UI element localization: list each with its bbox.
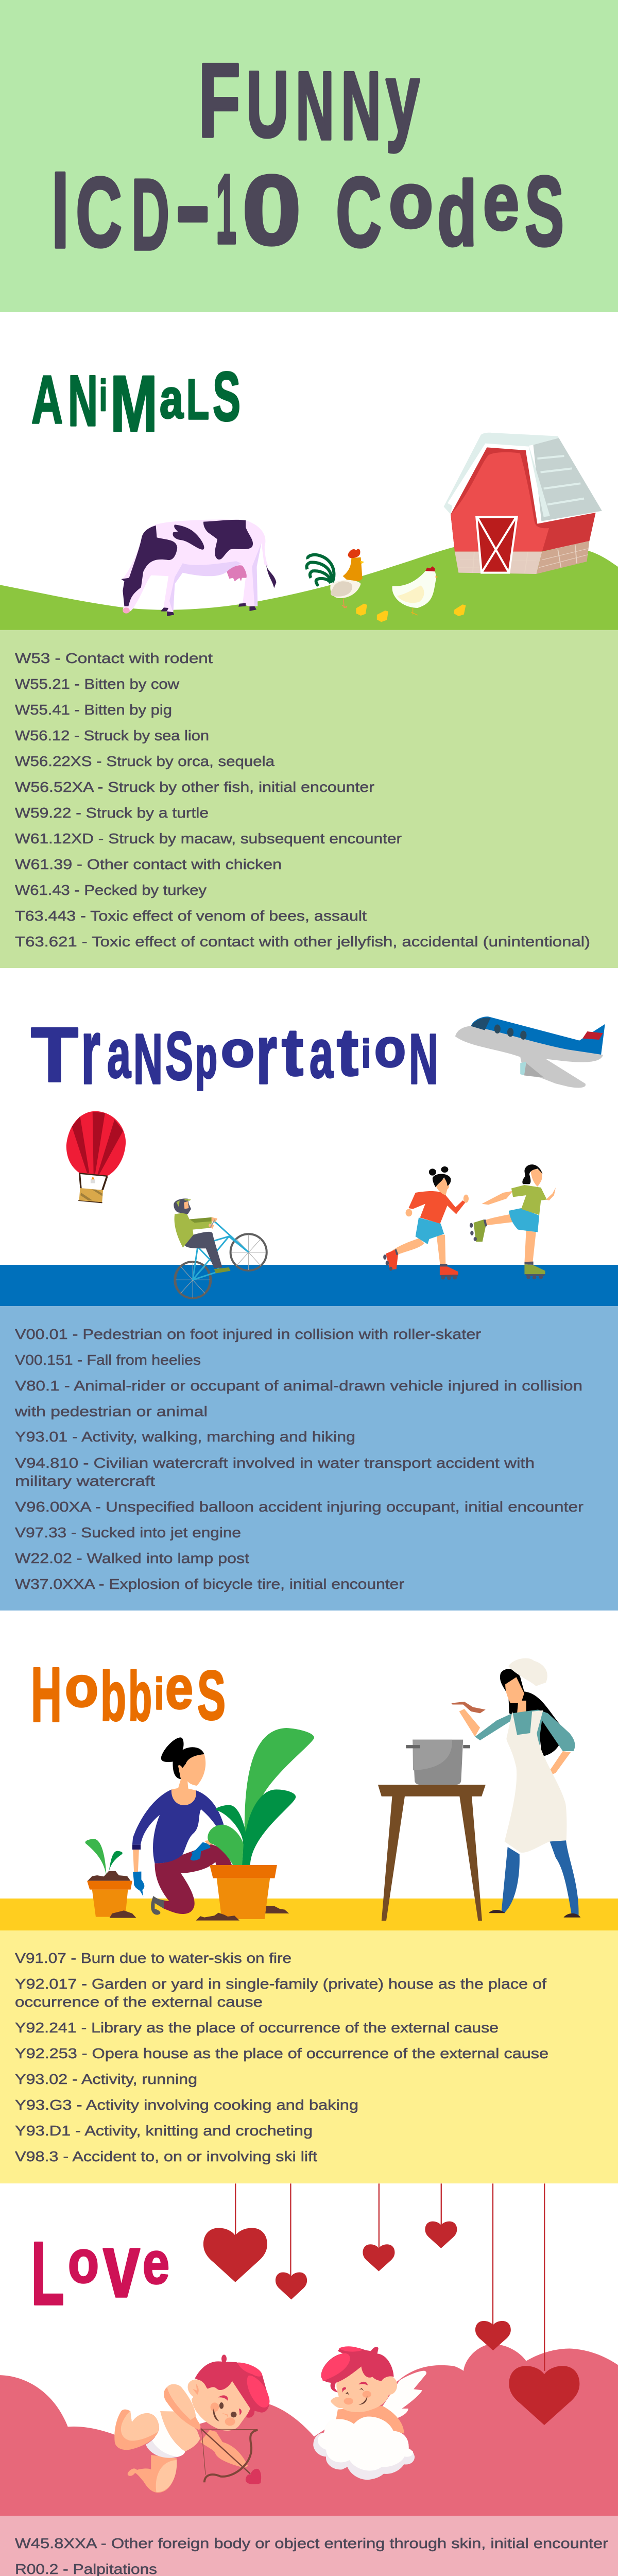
heading: transportation: t xyxy=(337,1014,358,1090)
panel: hobbies codes: V91.07 - Burn due to water-skis on fire xyxy=(15,1950,291,1966)
heading: hobbies: e xyxy=(165,1654,193,1721)
icon: big potted plant leaves back xyxy=(245,1728,314,1834)
panel: transportation codes xyxy=(0,1306,618,1611)
title: U xyxy=(246,52,289,157)
title: I xyxy=(52,149,69,270)
panel: transportation codes: V00.01 - Pedestrian on foot injured in collision with roller-skater xyxy=(15,1326,481,1342)
heading: transportation: r xyxy=(256,1007,277,1101)
icon: cupid with bow xyxy=(114,2354,269,2493)
panel: animal codes xyxy=(0,630,618,968)
icon: hanging hearts xyxy=(203,2183,579,2425)
heading: hobbies: b xyxy=(128,1657,152,1735)
title: y xyxy=(386,42,420,153)
panel: animal codes: W55.21 - Bitten by cow xyxy=(15,676,180,692)
panel: animal codes: W53 - Contact with rodent xyxy=(15,650,213,666)
icon: big potted plant xyxy=(196,1789,296,1921)
panel: hobbies codes: occurrence of the external cause xyxy=(15,1994,263,2010)
heading: animals: A xyxy=(31,362,63,437)
title: d xyxy=(437,162,477,265)
heading: transportation: a xyxy=(310,1015,334,1092)
panel: transportation codes: Y93.01 - Activity, walking, marching and hiking xyxy=(15,1429,355,1445)
title: N xyxy=(341,52,381,160)
title: 1 xyxy=(216,154,236,264)
panel: hobbies codes: Y92.253 - Opera house as the place of occurrence of the external cause xyxy=(15,2045,548,2061)
panel: hobbies codes: Y93.02 - Activity, running xyxy=(15,2071,197,2087)
heading: love: o xyxy=(68,2228,99,2295)
icon: airplane xyxy=(455,1016,605,1088)
panel: animal codes: W56.12 - Struck by sea lion xyxy=(15,727,209,743)
panel: animal codes: W61.43 - Pecked by turkey xyxy=(15,882,207,898)
panel: header xyxy=(0,0,618,312)
panel: animal codes: W61.39 - Other contact with chicken xyxy=(15,856,282,872)
panel: transportation codes: W37.0XXA - Explosion of bicycle tire, initial encounter xyxy=(15,1576,404,1592)
heading: transportation: p xyxy=(195,1024,217,1091)
panel: animal codes: T63.443 - Toxic effect of venom of bees, assault xyxy=(15,908,367,924)
heading: transportation: r xyxy=(81,1000,100,1104)
icon: chef at table with pot xyxy=(378,1658,580,1921)
heading: love: L xyxy=(31,2224,64,2324)
panel: animals xyxy=(0,358,618,630)
heading: transportation: o xyxy=(374,1019,406,1078)
illustrations: balloon, cyclist, skaters xyxy=(66,1111,556,1298)
illustration: farm animals and barn xyxy=(121,433,602,622)
heading: transportation: S xyxy=(165,1018,193,1094)
heading: animals: i xyxy=(99,371,107,420)
icon: gardener with plants xyxy=(85,1728,314,1921)
panel: hobbies codes xyxy=(0,1930,618,2183)
panel: animal codes: W59.22 - Struck by a turtle xyxy=(15,805,209,821)
floor xyxy=(0,1899,618,1930)
title: o xyxy=(389,157,433,244)
heading: animals: a xyxy=(160,367,184,430)
panel: transportation xyxy=(0,1000,618,1306)
panel: hobbies codes: Y93.D1 - Activity, knitting and crocheting xyxy=(15,2123,313,2139)
panel: animal codes: W56.22XS - Struck by orca, sequela xyxy=(15,753,274,769)
panel: transportation codes: V00.151 - Fall from heelies xyxy=(15,1352,201,1368)
heading: hobbies: H xyxy=(31,1651,62,1738)
icon: barn xyxy=(444,433,602,574)
panel: transportation codes: V96.00XA - Unspecified balloon accident injuring occupant, initial encounter xyxy=(15,1499,583,1515)
heading: transportation: t xyxy=(282,1014,303,1090)
icon: small potted plant xyxy=(85,1839,136,1918)
heading: animals: M xyxy=(110,359,158,448)
heading: animals: N xyxy=(68,360,98,441)
panel: hobbies xyxy=(0,1651,618,1930)
icon: chicks xyxy=(356,604,466,622)
heading: transportation: N xyxy=(133,1020,163,1099)
icon: gardener xyxy=(132,1737,232,1915)
road xyxy=(0,1265,618,1306)
heading: transportation: i xyxy=(362,1032,371,1076)
icon: cyclist on bicycle xyxy=(174,1198,267,1298)
ground: green hill xyxy=(0,546,618,630)
panel: transportation codes: V97.33 - Sucked into jet engine xyxy=(15,1524,241,1540)
panel: hobbies codes: Y93.G3 - Activity involving cooking and baking xyxy=(15,2097,358,2113)
panel: transportation codes: with pedestrian or animal xyxy=(14,1403,208,1419)
pink cloud hills xyxy=(0,2344,618,2519)
panel: animal codes: W56.52XA - Struck by other fish, initial encounter xyxy=(15,779,374,795)
panel: hobbies codes: Y92.241 - Library as the place of occurrence of the external cause xyxy=(15,2020,499,2036)
panel: hobbies codes: V98.3 - Accident to, on or involving ski lift xyxy=(15,2148,317,2164)
panel: animal codes: W55.41 - Bitten by pig xyxy=(15,702,172,718)
heading: transportation: o xyxy=(221,1022,254,1077)
title: e xyxy=(483,157,519,247)
heading: animals: L xyxy=(186,368,209,431)
icon: hot-air balloon xyxy=(66,1111,126,1203)
title: C xyxy=(76,157,122,267)
heading: hobbies: b xyxy=(100,1657,126,1735)
heading: hobbies: i xyxy=(154,1670,164,1719)
panel: love xyxy=(0,2183,618,2519)
title: N xyxy=(296,52,334,160)
title: - xyxy=(175,141,211,268)
panel: hobbies codes: Y92.017 - Garden or yard in single-family (private) house as the place of xyxy=(15,1976,546,1992)
panel: animal codes: T63.621 - Toxic effect of contact with other jellyfish, accidental (unintentional) xyxy=(15,934,590,950)
title: F xyxy=(198,42,241,159)
heading: hobbies: S xyxy=(197,1656,226,1734)
heading: animals: S xyxy=(213,358,241,435)
heading: love: v xyxy=(103,2215,140,2316)
icon: cupids xyxy=(114,2346,426,2493)
icon: cupid on cloud xyxy=(313,2346,426,2480)
panel: transportation codes: V94.810 - Civilian watercraft involved in water transport accident with xyxy=(15,1455,535,1471)
panel: transportation codes: V80.1 - Animal-rider or occupant of animal-drawn vehicle injured in collision xyxy=(15,1378,582,1394)
title: C xyxy=(336,157,382,267)
heading: hobbies: o xyxy=(65,1655,98,1719)
panel: transportation codes: W22.02 - Walked into lamp post xyxy=(15,1550,249,1566)
panel: love codes xyxy=(0,2516,618,2576)
icon: hen xyxy=(392,566,438,615)
heading: love: e xyxy=(143,2230,169,2296)
title: 0 xyxy=(242,155,301,265)
panel: animal codes: W61.12XD - Struck by macaw, subsequent encounter xyxy=(15,831,402,846)
icon: roller skater in green xyxy=(470,1164,556,1279)
heading: transportation: T xyxy=(31,1011,78,1098)
icon: cow xyxy=(121,519,277,616)
title: D xyxy=(131,158,169,271)
heading: transportation: N xyxy=(409,1020,438,1099)
panel: love codes: W45.8XXA - Other foreign body or object entering through skin, initial encounter xyxy=(15,2535,608,2551)
panel: transportation codes: military watercraft xyxy=(15,1473,155,1489)
heading: transportation: a xyxy=(107,1015,131,1092)
title: S xyxy=(525,156,564,266)
icon: rooster xyxy=(307,549,364,608)
icon: roller skater in red xyxy=(383,1166,469,1280)
